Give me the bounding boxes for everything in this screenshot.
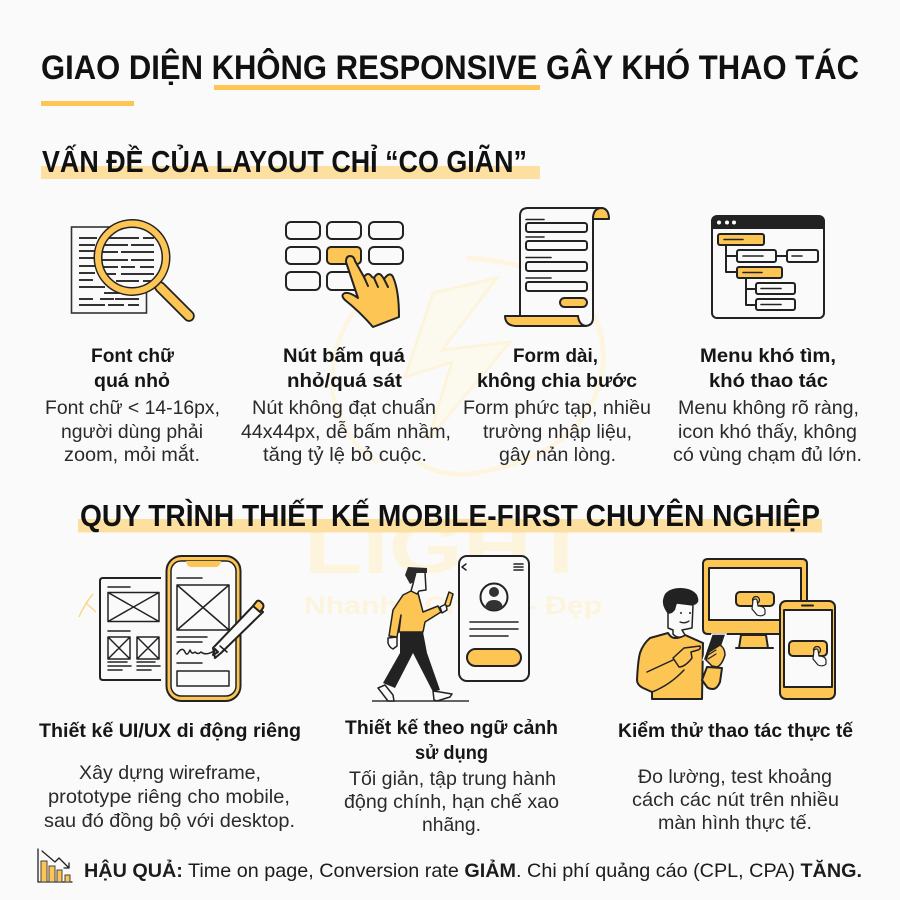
watermark: logo lightning bolt and brand: Nhanh - Chuẩn - Đẹp <box>304 592 602 620</box>
text: UI/UX description: sau đó đồng bộ với desktop. <box>44 810 295 832</box>
heading: UI/UX: Thiết kế UI/UX di động riêng <box>39 720 301 742</box>
icon: wireframes and pencil <box>100 556 264 701</box>
text: consequences: HẬU QUẢ: Time on page, Conversion rate GIẢM. Chi phí quảng cáo (CPL, CPA) TĂNG. <box>84 858 862 882</box>
text: form description: gây nản lòng. <box>499 444 616 466</box>
heading: testing: Kiểm thử thao tác thực tế <box>618 720 853 742</box>
icon: menu window <box>712 216 824 318</box>
watermark: logo lightning bolt and brand: LIGHT <box>304 506 590 589</box>
text: context description: nhãng. <box>422 814 481 836</box>
watermark: logo lightning bolt and brand <box>79 258 603 620</box>
text: UI/UX description: prototype riêng cho mobile, <box>48 786 290 808</box>
panel: menu: khó thao tác <box>709 370 828 392</box>
panel: small buttons: nhỏ/quá sát <box>287 370 403 392</box>
heading: buttons: Nút bấm quá <box>283 345 405 367</box>
text: menu description <box>673 397 862 466</box>
text: testing description <box>632 766 839 834</box>
text: menu description: icon khó thấy, không <box>678 421 857 443</box>
text: font description <box>45 397 220 466</box>
heading: form: Form dài, <box>513 345 598 367</box>
text: buttons description: 44x44px, dễ bấm nhầm, <box>241 420 451 443</box>
icon: button grid and hand <box>286 222 403 327</box>
text: form description: trường nhập liệu, <box>483 421 632 443</box>
text: buttons description <box>241 397 451 466</box>
text: testing description: cách các nút trên nhiều <box>632 789 839 811</box>
icon: form scroll <box>505 208 609 326</box>
heading: menu: Menu khó tìm, <box>700 345 836 367</box>
text: testing description: Đo lường, test khoảng <box>638 766 832 788</box>
icon: person testing on screens <box>637 559 835 699</box>
title accent rule <box>41 101 134 106</box>
text: font description: người dùng phải <box>61 421 203 443</box>
text: testing description: màn hình thực tế. <box>658 812 812 834</box>
text: context description: động chính, hạn chế xao <box>344 791 559 813</box>
panel: real testing <box>618 559 853 834</box>
text: menu description: có vùng chạm đủ lớn. <box>673 444 862 466</box>
panel: small buttons <box>241 222 451 466</box>
text: font description: Font chữ < 14-16px, <box>45 397 220 419</box>
text: buttons description: tăng tỷ lệ bỏ cuộc. <box>263 444 427 466</box>
panel: context of use: sử dụng <box>415 742 488 764</box>
panel: long form <box>463 208 651 466</box>
text: form description <box>463 397 651 466</box>
footer: consequences <box>38 849 862 882</box>
panel: mobile UI design <box>39 556 301 832</box>
text: font description: zoom, mỏi mắt. <box>64 443 200 466</box>
text: menu description: Menu không rõ ràng, <box>678 397 859 419</box>
panel: context of use <box>344 556 559 836</box>
heading: context: Thiết kế theo ngữ cảnh <box>345 717 558 739</box>
text: context description <box>344 768 559 836</box>
icon: declining bar chart <box>38 849 72 882</box>
icon: document under magnifier <box>72 222 189 316</box>
text: UI/UX description <box>44 762 295 832</box>
icon: walking person and phone mockup <box>372 556 529 701</box>
text: context description: Tối giản, tập trung hành <box>349 768 556 790</box>
panel: long form: không chia bước <box>477 370 637 392</box>
heading: problems: VẤN ĐỀ CỦA LAYOUT CHỈ “CO GIÃN” <box>42 143 527 179</box>
panel: menu <box>673 216 862 466</box>
text: form description: Form phức tạp, nhiều <box>463 397 651 419</box>
text: buttons description: Nút không đạt chuẩn <box>252 397 436 419</box>
text: UI/UX description: Xây dựng wireframe, <box>79 762 261 784</box>
heading: process: QUY TRÌNH THIẾT KẾ MOBILE-FIRST CHUYÊN NGHIỆP <box>80 497 820 533</box>
panel: small font <box>45 222 220 466</box>
heading: font: Font chữ <box>91 345 175 367</box>
panel: small font: quá nhỏ <box>94 370 170 392</box>
